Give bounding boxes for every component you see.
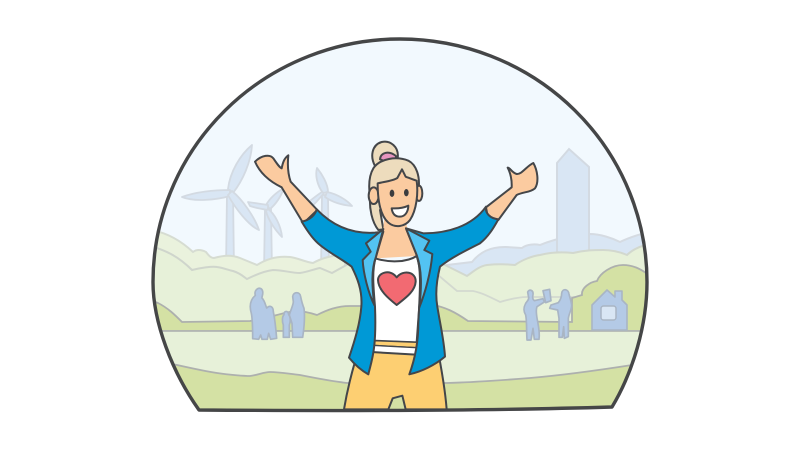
ears [369,187,379,204]
icon: house [592,290,627,330]
wind turbine 3 [310,167,353,258]
far light green hills [157,231,346,278]
shirt [373,256,421,342]
right lapel [406,228,432,307]
silhouettes of two people with a document [524,289,572,340]
second parent [289,293,305,337]
paper [543,289,551,303]
light green hills left [156,247,360,321]
light green meadow [165,339,638,382]
white shirt hem [371,345,417,355]
illustration: woman welcoming in a green landscape [151,37,649,412]
jacket left side with sleeve [302,209,383,374]
parent with child [250,288,277,339]
foreground green field [174,364,630,409]
background blue hills [446,233,642,275]
panel: dome scene [150,35,650,420]
scrunchie [380,153,396,161]
sky [160,41,640,264]
person holding paper [524,290,544,340]
face [378,169,417,226]
house window [601,306,616,320]
heart [378,272,416,305]
neck and chest [376,220,417,258]
woman with raised arms [255,142,537,409]
dome outline [153,39,647,411]
left lapel [363,229,383,305]
mid green band right with bush [420,265,650,331]
light green hills right [437,245,645,321]
right arm and hand [486,163,537,220]
wind turbine 2 [247,188,284,260]
trousers [344,352,447,409]
eyes [390,190,394,197]
back hair [369,158,419,230]
family silhouettes [250,288,305,339]
person with outstretched arm [550,290,572,338]
smile [392,206,408,217]
hill contour line right [439,275,575,303]
hair bun [372,142,398,166]
yellow waistband [372,341,417,348]
mid green band left [156,301,360,330]
skyscraper [557,149,589,254]
jacket right side with sleeve [406,207,498,374]
wind turbine 1 [182,145,259,270]
small child [282,311,290,337]
left arm and hand [255,155,317,223]
